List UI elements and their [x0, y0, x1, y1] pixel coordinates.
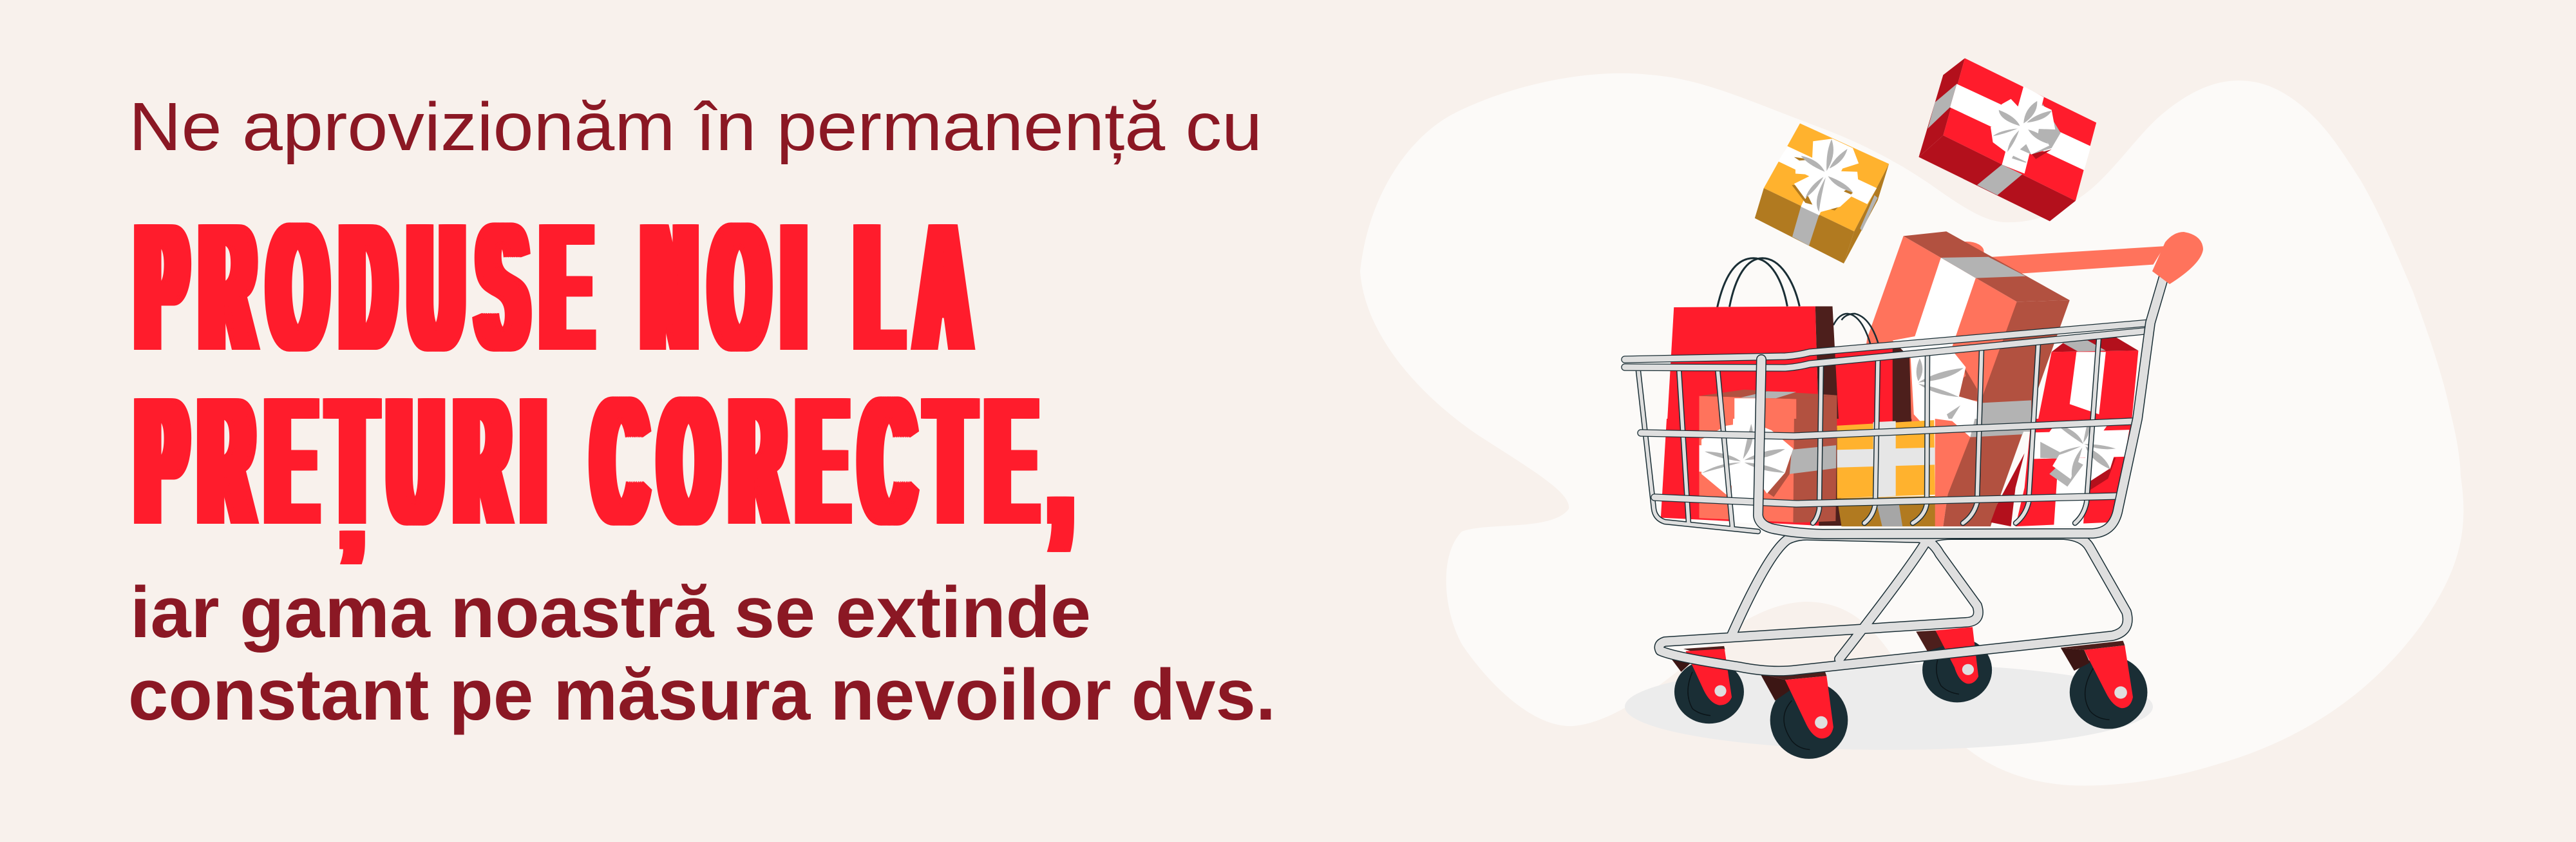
icon: red gift [1918, 58, 2096, 221]
headline line 1: PRODUSE NOI LA [138, 185, 985, 388]
icon: back-left wheel [1670, 646, 1744, 723]
icon: red bag lower [1661, 419, 1911, 526]
cart frame [1625, 232, 2203, 671]
icon: red shopping bag [1667, 258, 1839, 432]
flying gifts [1755, 58, 2096, 263]
cart contents [1661, 231, 2164, 526]
icon: front-left wheel [1760, 671, 1848, 759]
icon: right gift lower [1991, 419, 2133, 526]
icon: large gift lower [1935, 419, 2029, 526]
intro text: Ne aprovizionăm în permanență cu [129, 89, 1262, 165]
closing text line 2: constant pe măsura nevoilor dvs. [128, 655, 1276, 735]
wheels [1670, 627, 2147, 759]
basket post and bottom rim [1758, 274, 2164, 534]
icon: big gift bow [1893, 335, 1977, 432]
headline line 2: PREȚURI CORECTE, [138, 359, 1086, 562]
closing text line 1: iar gama noastră se extinde [130, 572, 1091, 653]
basket rails [1625, 323, 2150, 504]
basket wire bars [1638, 339, 2099, 531]
lower chassis [1660, 535, 2128, 671]
icon: yellow gift [1755, 124, 1889, 263]
icon: small salmon gift (top) [1700, 390, 1837, 432]
icon: large salmon gift [1853, 231, 2070, 432]
ground shadow [1625, 664, 2153, 750]
icon: yellow gift in cart [1837, 420, 1943, 526]
background blob [1360, 73, 2463, 786]
icon: handle grip [2152, 232, 2203, 284]
icon: front-right wheel [2061, 641, 2147, 729]
icon: back-right wheel [1916, 627, 1992, 702]
icon: small salmon gift (bottom) [1700, 419, 1837, 523]
icon: cart handle [1949, 242, 2164, 274]
icon: right gift (upper part) [2036, 337, 2138, 432]
icon: back bag [1833, 314, 1911, 432]
